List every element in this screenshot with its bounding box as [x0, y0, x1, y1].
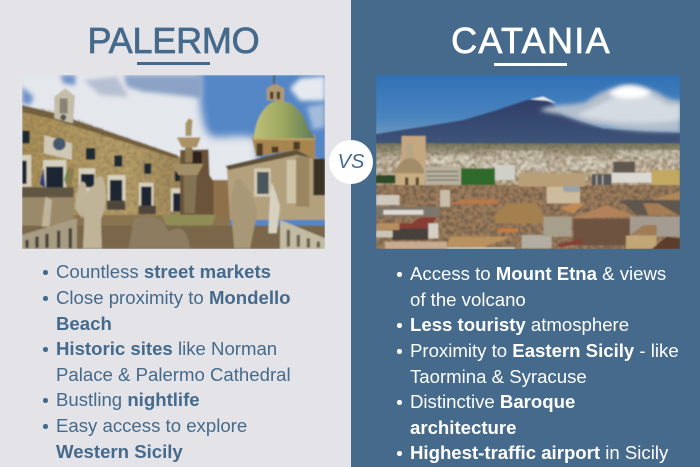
- rooftops: [376, 185, 680, 249]
- heading: Catania: CATANIA: [451, 20, 611, 61]
- stair base: [22, 226, 325, 249]
- bullet 1: Countless street markets: [56, 261, 271, 282]
- bullet 2: Close proximity to Mondello: [56, 287, 291, 308]
- mountain: [376, 98, 680, 147]
- heading underline: Palermo: [137, 62, 210, 65]
- flags: [40, 168, 45, 188]
- palace: [22, 105, 213, 227]
- photo: Catania with Mount Etna: [376, 75, 680, 249]
- clock tower: [54, 88, 75, 123]
- bullet 4: Bustling nightlife: [56, 389, 200, 410]
- bullet 4: [397, 391, 575, 438]
- list: Palermo highlights: [43, 261, 291, 462]
- bullet 3: [397, 340, 679, 387]
- bullet 5: Highest-traffic airport in Sicily: [410, 442, 668, 463]
- panel: Catania background: [351, 0, 700, 467]
- list: Catania highlights: [397, 263, 679, 463]
- lower wall and balcony: [22, 197, 74, 227]
- panel: Palermo background: [0, 0, 351, 467]
- drum: [252, 137, 315, 159]
- bullet 3: Palace & Palermo Cathedral: [56, 364, 291, 385]
- bullet 3: Proximity to Eastern Sicily - like: [410, 340, 679, 361]
- bullet 1: Access to Mount Etna & views: [410, 263, 666, 284]
- bullet 2: Less touristy atmosphere: [410, 314, 629, 335]
- bullet 3: [43, 338, 291, 385]
- bullet 2: [43, 287, 291, 334]
- sky: [376, 75, 680, 145]
- bullet 3: Taormina & Syracuse: [410, 366, 587, 387]
- statues: [42, 176, 280, 248]
- distant city: [376, 143, 680, 187]
- bullet 2: Beach: [56, 313, 112, 334]
- windows: [22, 131, 180, 181]
- bullet 4: Distinctive Baroque: [410, 391, 575, 412]
- cloud: [540, 85, 680, 132]
- badge: VS: VS: [338, 151, 364, 173]
- bullet 3: Historic sites like Norman: [56, 338, 277, 359]
- apartment blocks: [402, 136, 426, 168]
- badge: VS: [329, 140, 373, 184]
- bullet 5: Western Sicily: [56, 441, 183, 462]
- bullet 4: architecture: [410, 417, 516, 438]
- sky: [22, 75, 325, 249]
- bullet 1: [397, 263, 666, 310]
- bullet 5: [43, 415, 247, 462]
- dome: [253, 101, 315, 138]
- heading underline: Catania: [494, 63, 567, 66]
- church dome: [395, 158, 424, 174]
- fountain: [185, 118, 192, 136]
- photo: Palermo fountain square: [22, 75, 325, 249]
- bullet 5: Easy access to explore: [56, 415, 247, 436]
- clock: [44, 135, 72, 160]
- bullet 1: of the volcano: [410, 289, 526, 310]
- dark tower behind fountain: [180, 149, 213, 217]
- red roof building: [393, 217, 437, 228]
- church: [227, 150, 325, 220]
- heading: Palermo: PALERMO: [88, 20, 259, 61]
